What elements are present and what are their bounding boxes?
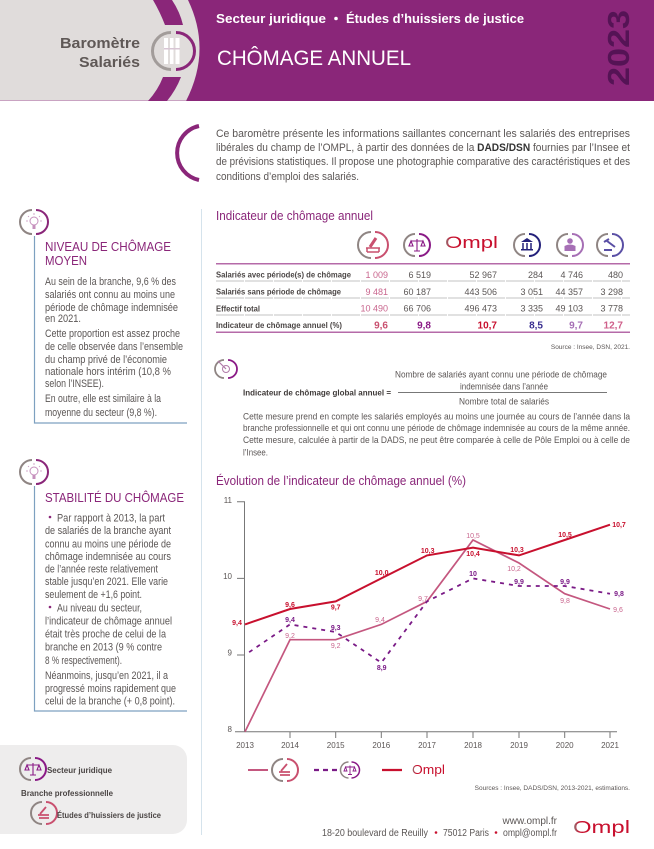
- label: études: Études d’huissiers de justice: [57, 811, 162, 820]
- chart source: Sources : Insee, DADS/DSN, 2013-2021, estimations.: [475, 785, 630, 792]
- row: sans chômage: [216, 286, 623, 297]
- labels: Ompl: 9,4: [232, 620, 242, 627]
- heading: [45, 239, 171, 268]
- labels: Ompl: 10,0: [375, 570, 389, 577]
- icon: mortar: [358, 232, 388, 258]
- footer address: [322, 816, 558, 839]
- formula: [243, 370, 607, 406]
- labels: études d'huissiers: 10,5: [466, 533, 480, 540]
- row: sans chômage: 3 298: [600, 287, 623, 297]
- x axis labels: 2017: [418, 741, 436, 750]
- logo: Ompl footer: Ompl: [573, 817, 630, 837]
- body text: 8 % respectivement).: [45, 655, 122, 667]
- icon: gavel: [597, 234, 623, 256]
- body text: [45, 512, 176, 708]
- labels: secteur juridique: 9,3: [331, 625, 341, 632]
- row: effectif: Effectif total: [216, 304, 260, 314]
- labels: secteur juridique: 10: [469, 571, 477, 578]
- body text: période de chômage indemnisée: [45, 302, 178, 314]
- label: branche: Branche professionnelle: [21, 789, 114, 798]
- row: indicateur: 9,6: [374, 320, 388, 332]
- heading: table: Indicateur de chômage annuel: [216, 209, 373, 223]
- labels: Ompl: 10,7: [612, 522, 626, 529]
- y axis labels: 11: [224, 496, 233, 505]
- header subtitle: Études d’huissiers de justice: [346, 11, 524, 26]
- y axis labels: 9: [228, 648, 233, 658]
- body text: Par rapport à 2013, la part: [57, 512, 165, 524]
- body text: du champ privé de l’économie: [45, 354, 167, 366]
- labels: secteur juridique: [285, 571, 624, 672]
- row: sans chômage: 3 051: [520, 287, 543, 297]
- x axis labels: 2018: [464, 741, 482, 750]
- body text: de salariés de la branche ayant: [45, 525, 171, 537]
- row: sans chômage: 60 187: [403, 287, 431, 297]
- labels: Ompl: [232, 522, 626, 627]
- body text: salariés ont connu au moins une: [45, 289, 175, 301]
- row: avec chômage: 52 967: [469, 270, 497, 280]
- icon: barometer emblem: [152, 32, 194, 70]
- row: indicateur: Indicateur de chômage annuel (%): [216, 320, 342, 330]
- body text: Néanmoins, jusqu’en 2021, il a: [45, 670, 169, 682]
- table source: Source : Insee, DSN, 2021.: [551, 344, 630, 351]
- intro text: libérales du champ de l’OMPL, à partir des données de la DADS/DSN fournies par l’Insee et: [216, 142, 630, 154]
- icon: bank: [514, 234, 540, 256]
- icon: scales: [404, 234, 430, 256]
- row: indicateur: 8,5: [529, 320, 543, 332]
- y axis labels: [223, 496, 233, 734]
- labels: Ompl: 10,3: [421, 548, 435, 555]
- footer address: 18-20 boulevard de Reuilly: [322, 828, 428, 839]
- x axis labels: 2013: [236, 741, 254, 750]
- body text: était très proche de celui de la: [45, 628, 167, 640]
- formula: Indicateur de chômage global annuel =: [243, 388, 391, 398]
- header subtitle: Secteur juridique: [216, 11, 326, 26]
- labels: études d'huissiers: 10,2: [507, 566, 521, 573]
- main title: CHÔMAGE ANNUEL: [217, 47, 411, 70]
- body text: de l’année reste relativement: [45, 564, 158, 576]
- formula explanation: [243, 412, 631, 458]
- row: indicateur: 9,7: [569, 320, 583, 332]
- x axis labels: 2014: [281, 741, 299, 750]
- labels: études d'huissiers: 9,8: [560, 598, 570, 605]
- labels: secteur juridique: 9,9: [560, 579, 570, 586]
- logo: Ompl: Ompl: [445, 233, 498, 252]
- panel border: [34, 236, 187, 423]
- heading: NIVEAU DE CHÔMAGE: [45, 239, 171, 254]
- labels: Ompl: 10,3: [510, 547, 524, 554]
- y axis labels: 8: [228, 725, 233, 734]
- body text: de celle observée dans l’ensemble: [45, 341, 183, 353]
- panel: secteur et branche: [0, 745, 187, 834]
- body text: En outre, elle est similaire à la: [45, 393, 162, 405]
- labels: secteur juridique: 8,9: [377, 665, 387, 672]
- labels: Ompl: 10,5: [558, 532, 572, 539]
- formula: Nombre total de salariés: [459, 396, 549, 406]
- y axis labels: 10: [223, 572, 233, 581]
- body text: progressé moins rapidement que: [45, 683, 176, 695]
- x axis labels: 2019: [510, 741, 528, 750]
- table: indicateur de chômage annuel: [216, 232, 630, 333]
- row: sans chômage: Salariés sans période de chômage: [216, 286, 341, 296]
- row: effectif: 3 778: [600, 304, 623, 314]
- heading: chart: Évolution de l’indicateur de chômage annuel (%): [216, 473, 466, 488]
- body text: en 2021.: [45, 313, 81, 325]
- labels: études d'huissiers: 9,2: [285, 633, 295, 640]
- icon: target: [215, 360, 237, 378]
- icon: scales: [20, 758, 46, 780]
- panel border: [34, 486, 187, 711]
- labels: secteur juridique: 9,4: [285, 617, 295, 624]
- line chart: [223, 496, 626, 750]
- label: secteur: Secteur juridique: [47, 766, 113, 775]
- x axis labels: 2020: [556, 741, 574, 750]
- icon: light bulb: [20, 460, 48, 484]
- intro bracket: [177, 126, 199, 180]
- body text: Au niveau du secteur,: [57, 602, 142, 614]
- body text: moyenne du secteur (9,8 %).: [45, 407, 157, 419]
- axes: [235, 502, 617, 738]
- footer address: www.ompl.fr: [502, 816, 558, 827]
- icon: person: [557, 234, 583, 256]
- panel: niveau de chômage moyen: [20, 210, 187, 423]
- row: indicateur: 10,7: [478, 320, 497, 332]
- body text: connu au moins une période de: [45, 538, 171, 550]
- icon: mortar: [272, 759, 298, 781]
- heading: MOYEN: [45, 253, 87, 268]
- series: études d'huissiers: [245, 540, 610, 732]
- labels: secteur juridique: 9,8: [614, 591, 624, 598]
- labels: Ompl: 9,7: [331, 604, 341, 612]
- labels: études d'huissiers: 9,6: [613, 607, 623, 614]
- series: secteur juridique: [245, 578, 610, 663]
- barometer title: Baromètre: [60, 36, 140, 52]
- body text: chômage indemnisée au cours: [45, 551, 171, 563]
- body text: l’indicateur de chômage annuel: [45, 616, 172, 628]
- row: avec chômage: 4 746: [560, 270, 583, 280]
- row: effectif: 496 473: [464, 304, 497, 314]
- body text: Cette proportion est assez proche: [45, 328, 180, 340]
- row: avec chômage: [216, 270, 623, 280]
- row: avec chômage: 6 519: [408, 270, 431, 280]
- chart legend: [248, 759, 445, 781]
- row: sans chômage: 9 481: [365, 287, 388, 297]
- panel: stabilité du chômage: [20, 460, 187, 711]
- intro text: [216, 128, 630, 183]
- row: sans chômage: 443 506: [464, 287, 497, 297]
- row: avec chômage: 284: [528, 270, 543, 280]
- labels: études d'huissiers: 9,4: [375, 617, 385, 624]
- labels: études d'huissiers: [285, 533, 623, 650]
- icon: scales: [340, 762, 360, 778]
- body text: branche en 2013 (9 % contre: [45, 642, 162, 654]
- body text: [45, 276, 183, 419]
- footer address: 75012 Paris: [443, 828, 489, 839]
- sidebar divider: [201, 209, 202, 835]
- row: indicateur: [216, 320, 623, 332]
- body text: seulement de +1,6 point.: [45, 589, 142, 601]
- body text: celui de la branche (+ 0,8 point).: [45, 696, 175, 708]
- row: avec chômage: Salariés avec période(s) de chômage: [216, 270, 351, 280]
- row: effectif: [216, 304, 623, 314]
- row: sans chômage: 44 357: [555, 287, 583, 297]
- x axis labels: 2016: [372, 741, 391, 750]
- body text: Au sein de la branche, 9,6 % des: [45, 276, 176, 288]
- row: effectif: 66 706: [403, 304, 431, 314]
- intro text: Ce baromètre présente les informations saillantes concernant les salariés des entreprises: [216, 128, 630, 140]
- year: 2023: [601, 10, 636, 86]
- row: effectif: 3 335: [520, 304, 543, 314]
- labels: études d'huissiers: 9,2: [331, 643, 341, 650]
- formula explanation: l’Insee.: [243, 448, 268, 458]
- icon: light bulb: [20, 210, 48, 234]
- row: indicateur: 9,8: [417, 320, 431, 332]
- row: avec chômage: 480: [608, 270, 623, 280]
- labels: secteur juridique: 9,9: [514, 579, 524, 586]
- row: avec chômage: 1 009: [365, 270, 388, 280]
- barometer title: Salariés: [79, 55, 140, 71]
- labels: Ompl: 10,4: [466, 551, 480, 558]
- intro text: conditions d’emploi des salariés.: [216, 171, 359, 183]
- logo: Ompl: Ompl: [412, 763, 445, 777]
- body text: nationale hors intérim (10,8 %: [45, 366, 171, 378]
- x axis labels: 2021: [601, 741, 619, 750]
- row: indicateur: 12,7: [604, 320, 623, 332]
- body text: selon l’INSEE).: [45, 378, 104, 390]
- formula: indemnisée dans l’année: [460, 382, 548, 392]
- labels: Ompl: 9,6: [285, 602, 295, 609]
- header subtitle: [216, 11, 524, 26]
- series: Ompl: [245, 525, 610, 624]
- row: effectif: 49 103: [555, 304, 583, 314]
- heading: STABILITÉ DU CHÔMAGE: [45, 490, 184, 505]
- formula: Nombre de salariés ayant connu une période de chômage: [395, 370, 607, 380]
- header banner: [0, 0, 654, 101]
- x axis labels: 2015: [327, 741, 345, 750]
- footer address: ompl@ompl.fr: [503, 828, 558, 839]
- x axis labels: [236, 741, 619, 750]
- icon: mortar: [31, 802, 57, 824]
- barometer title: [60, 36, 140, 71]
- labels: études d'huissiers: 9,7: [418, 596, 428, 603]
- row: effectif: 10 490: [360, 304, 388, 314]
- body text: stable jusqu’en 2021. Elle varie: [45, 576, 168, 588]
